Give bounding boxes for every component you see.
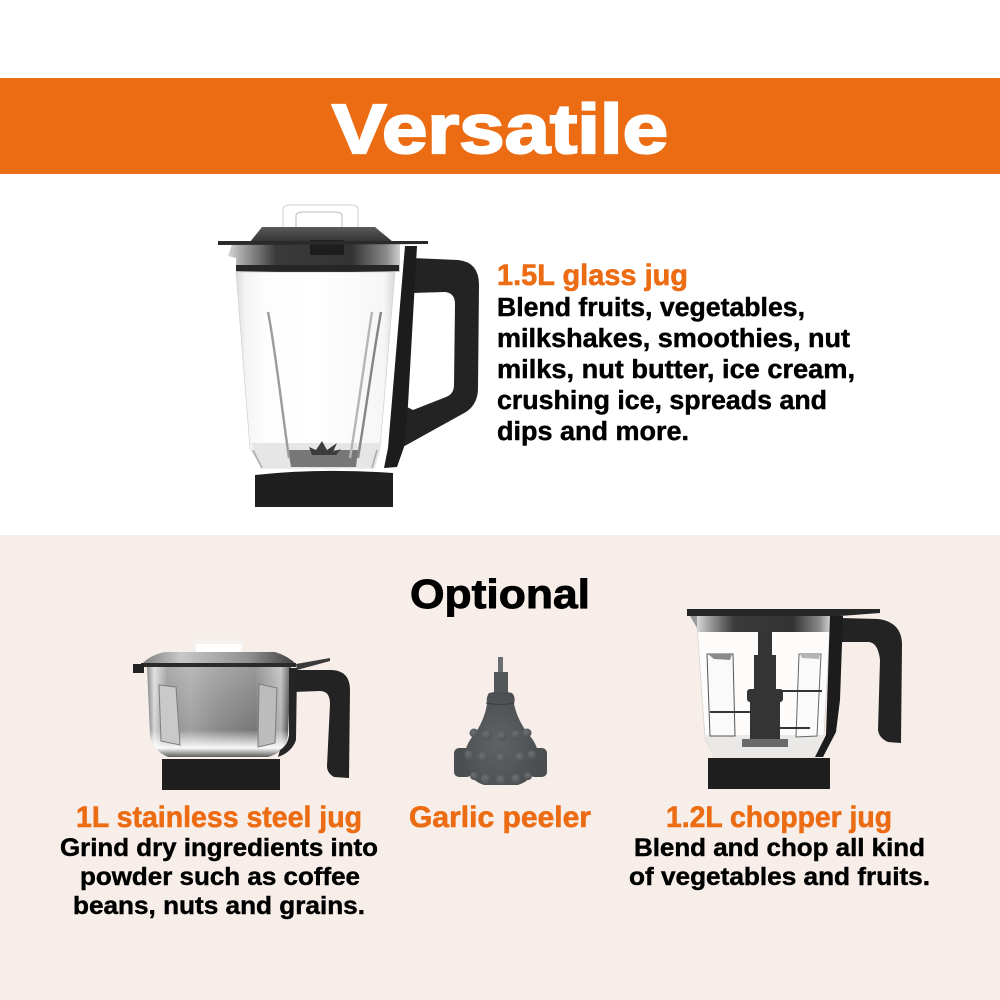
lid collar xyxy=(697,616,830,632)
image: 1.2L chopper jug xyxy=(687,609,902,789)
inner fins xyxy=(159,685,180,745)
handle strip xyxy=(384,246,417,468)
title text: Versatile xyxy=(332,90,668,168)
glass body xyxy=(236,272,395,468)
heading: 1.2L chopper jug xyxy=(666,801,892,834)
section heading: Optional: Optional xyxy=(410,571,590,617)
image: 1.5L glass jug xyxy=(218,205,479,507)
knob xyxy=(193,639,244,653)
text block: 1L stainless steel jug: powder such as coffee xyxy=(80,863,360,891)
lid xyxy=(250,227,393,242)
text block: 1.2L chopper jug: Blend and chop all kind xyxy=(634,834,925,862)
base xyxy=(162,759,280,790)
side fins xyxy=(454,748,472,777)
shaft xyxy=(498,657,503,673)
lid knob xyxy=(283,205,358,228)
glass body xyxy=(697,625,830,757)
bumps xyxy=(464,728,536,785)
text block: glass jug: Blend fruits, vegetables, xyxy=(497,294,805,322)
inner fins xyxy=(707,654,735,736)
text block: 1.2L chopper jug: of vegetables and fruits. xyxy=(629,863,930,891)
text block: glass jug: milkshakes, smoothies, nut xyxy=(497,325,851,353)
handle strip xyxy=(815,616,843,757)
text block: glass jug: dips and more. xyxy=(497,418,689,446)
rim xyxy=(218,241,428,245)
clasp xyxy=(296,658,330,670)
text block: glass jug: crushing ice, spreads and xyxy=(497,387,827,415)
text block: 1L stainless steel jug: beans, nuts and grains. xyxy=(73,892,365,920)
steel body xyxy=(147,667,291,757)
pear body xyxy=(465,692,538,785)
text block: 1L stainless steel jug xyxy=(60,801,378,920)
text block: Garlic peeler: Garlic peeler xyxy=(409,801,591,834)
collar xyxy=(228,244,400,272)
handle xyxy=(288,670,350,778)
handle xyxy=(841,618,902,743)
motor base xyxy=(255,471,393,507)
image: 1L stainless steel jug xyxy=(133,639,350,790)
lid xyxy=(142,652,296,664)
text block: glass jug: milks, nut butter, ice cream, xyxy=(497,356,855,384)
blade assembly xyxy=(710,630,822,747)
heading: 1.5L glass jug xyxy=(497,259,688,292)
jug handle xyxy=(401,258,479,448)
motor base xyxy=(708,758,830,789)
bottom section background xyxy=(0,535,1000,1000)
image: garlic peeler xyxy=(454,657,547,785)
heading: 1L stainless steel jug xyxy=(76,801,362,834)
lid xyxy=(687,609,880,616)
text block: 1.2L chopper jug xyxy=(629,801,930,891)
strap xyxy=(278,668,297,757)
text block: 1L stainless steel jug: Grind dry ingredients into xyxy=(60,834,378,862)
title banner xyxy=(0,78,1000,174)
text block: glass jug xyxy=(497,259,855,446)
